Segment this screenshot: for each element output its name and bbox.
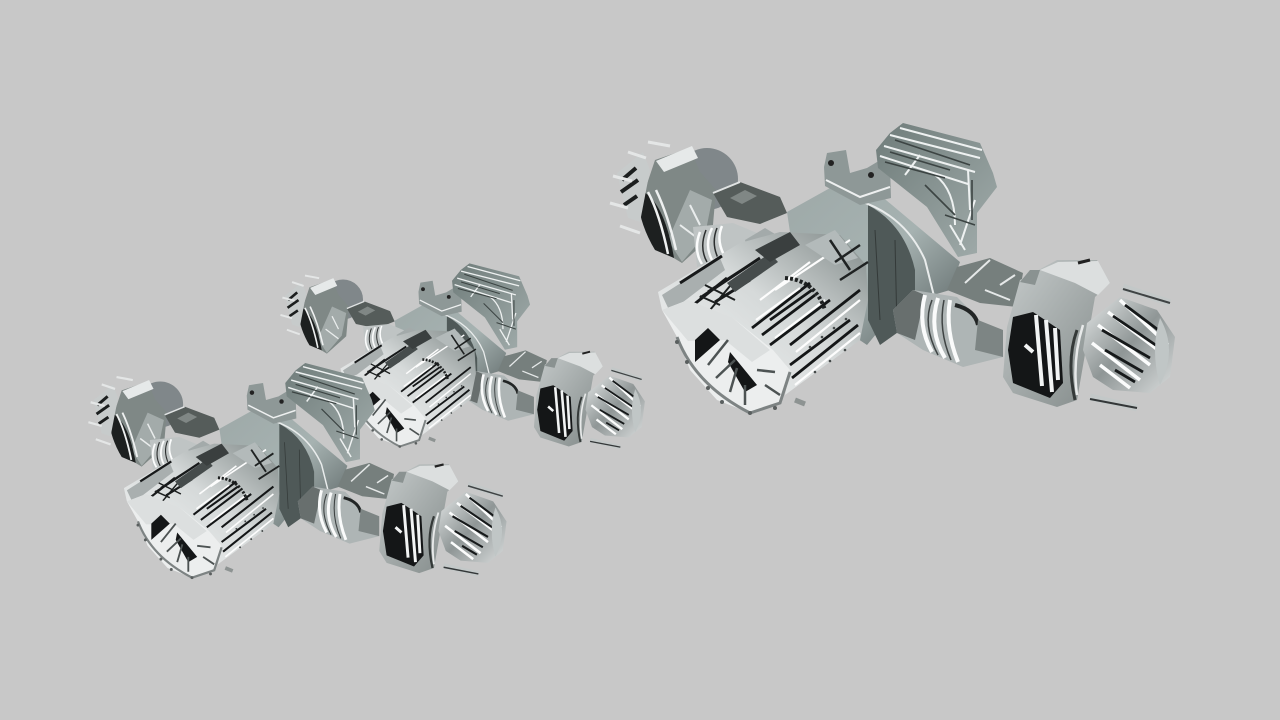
axle: small, rear of the pair: [280, 263, 645, 448]
axle: small, front of the pair: [88, 363, 506, 579]
axle: large, right: [610, 123, 1175, 415]
